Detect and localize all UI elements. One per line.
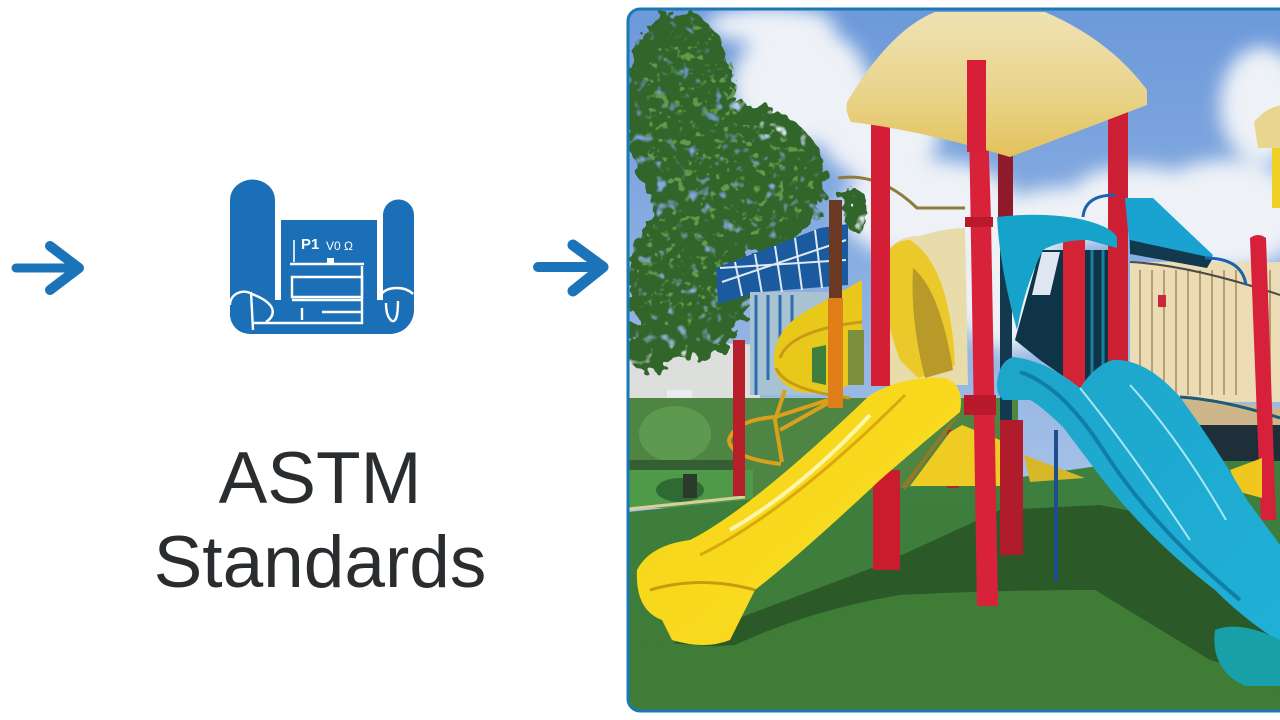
fence bbox=[1130, 262, 1280, 402]
blue slide bbox=[997, 357, 1280, 686]
central dark structure bbox=[1015, 250, 1108, 381]
front grass and ground shadow bbox=[672, 505, 1269, 662]
deck bbox=[1180, 397, 1280, 426]
lower back slide bbox=[910, 425, 1000, 486]
slide underside bbox=[901, 412, 962, 490]
background building bbox=[630, 344, 760, 398]
blue hood bbox=[997, 215, 1117, 330]
far net bbox=[716, 224, 848, 304]
back posts bbox=[998, 150, 1013, 220]
photo frame bbox=[628, 9, 1280, 711]
right roof corner bbox=[1254, 105, 1280, 148]
far posts bbox=[733, 340, 745, 496]
title: Standards bbox=[154, 522, 486, 603]
red posts mid bbox=[1063, 240, 1085, 390]
title: ASTM bbox=[219, 438, 421, 519]
tree bbox=[625, 10, 867, 373]
orange rails bbox=[729, 390, 830, 464]
blue canopy bbox=[1083, 195, 1246, 285]
sky bbox=[628, 9, 1280, 529]
far curled slide bbox=[774, 280, 864, 398]
tunnel bbox=[890, 228, 968, 385]
icon: blueprint scroll bbox=[230, 180, 414, 334]
grass bbox=[630, 461, 1280, 690]
title bbox=[154, 438, 486, 603]
background hedges and lawn bbox=[628, 398, 1018, 498]
roof bbox=[846, 12, 1147, 157]
icon label: blueprint text: P1 bbox=[301, 236, 319, 253]
photo: playground bbox=[625, 7, 1280, 720]
arrow: right bbox=[538, 245, 603, 291]
main red post bbox=[964, 150, 998, 606]
icon: blueprint scroll: V0 Ω bbox=[326, 239, 353, 253]
lower foot details bbox=[1230, 458, 1262, 498]
left post bbox=[871, 118, 890, 386]
far mesh panel bbox=[750, 292, 830, 395]
arrow: left bbox=[16, 246, 79, 290]
yellow slide bbox=[637, 378, 961, 645]
clouds bbox=[705, 7, 1280, 350]
